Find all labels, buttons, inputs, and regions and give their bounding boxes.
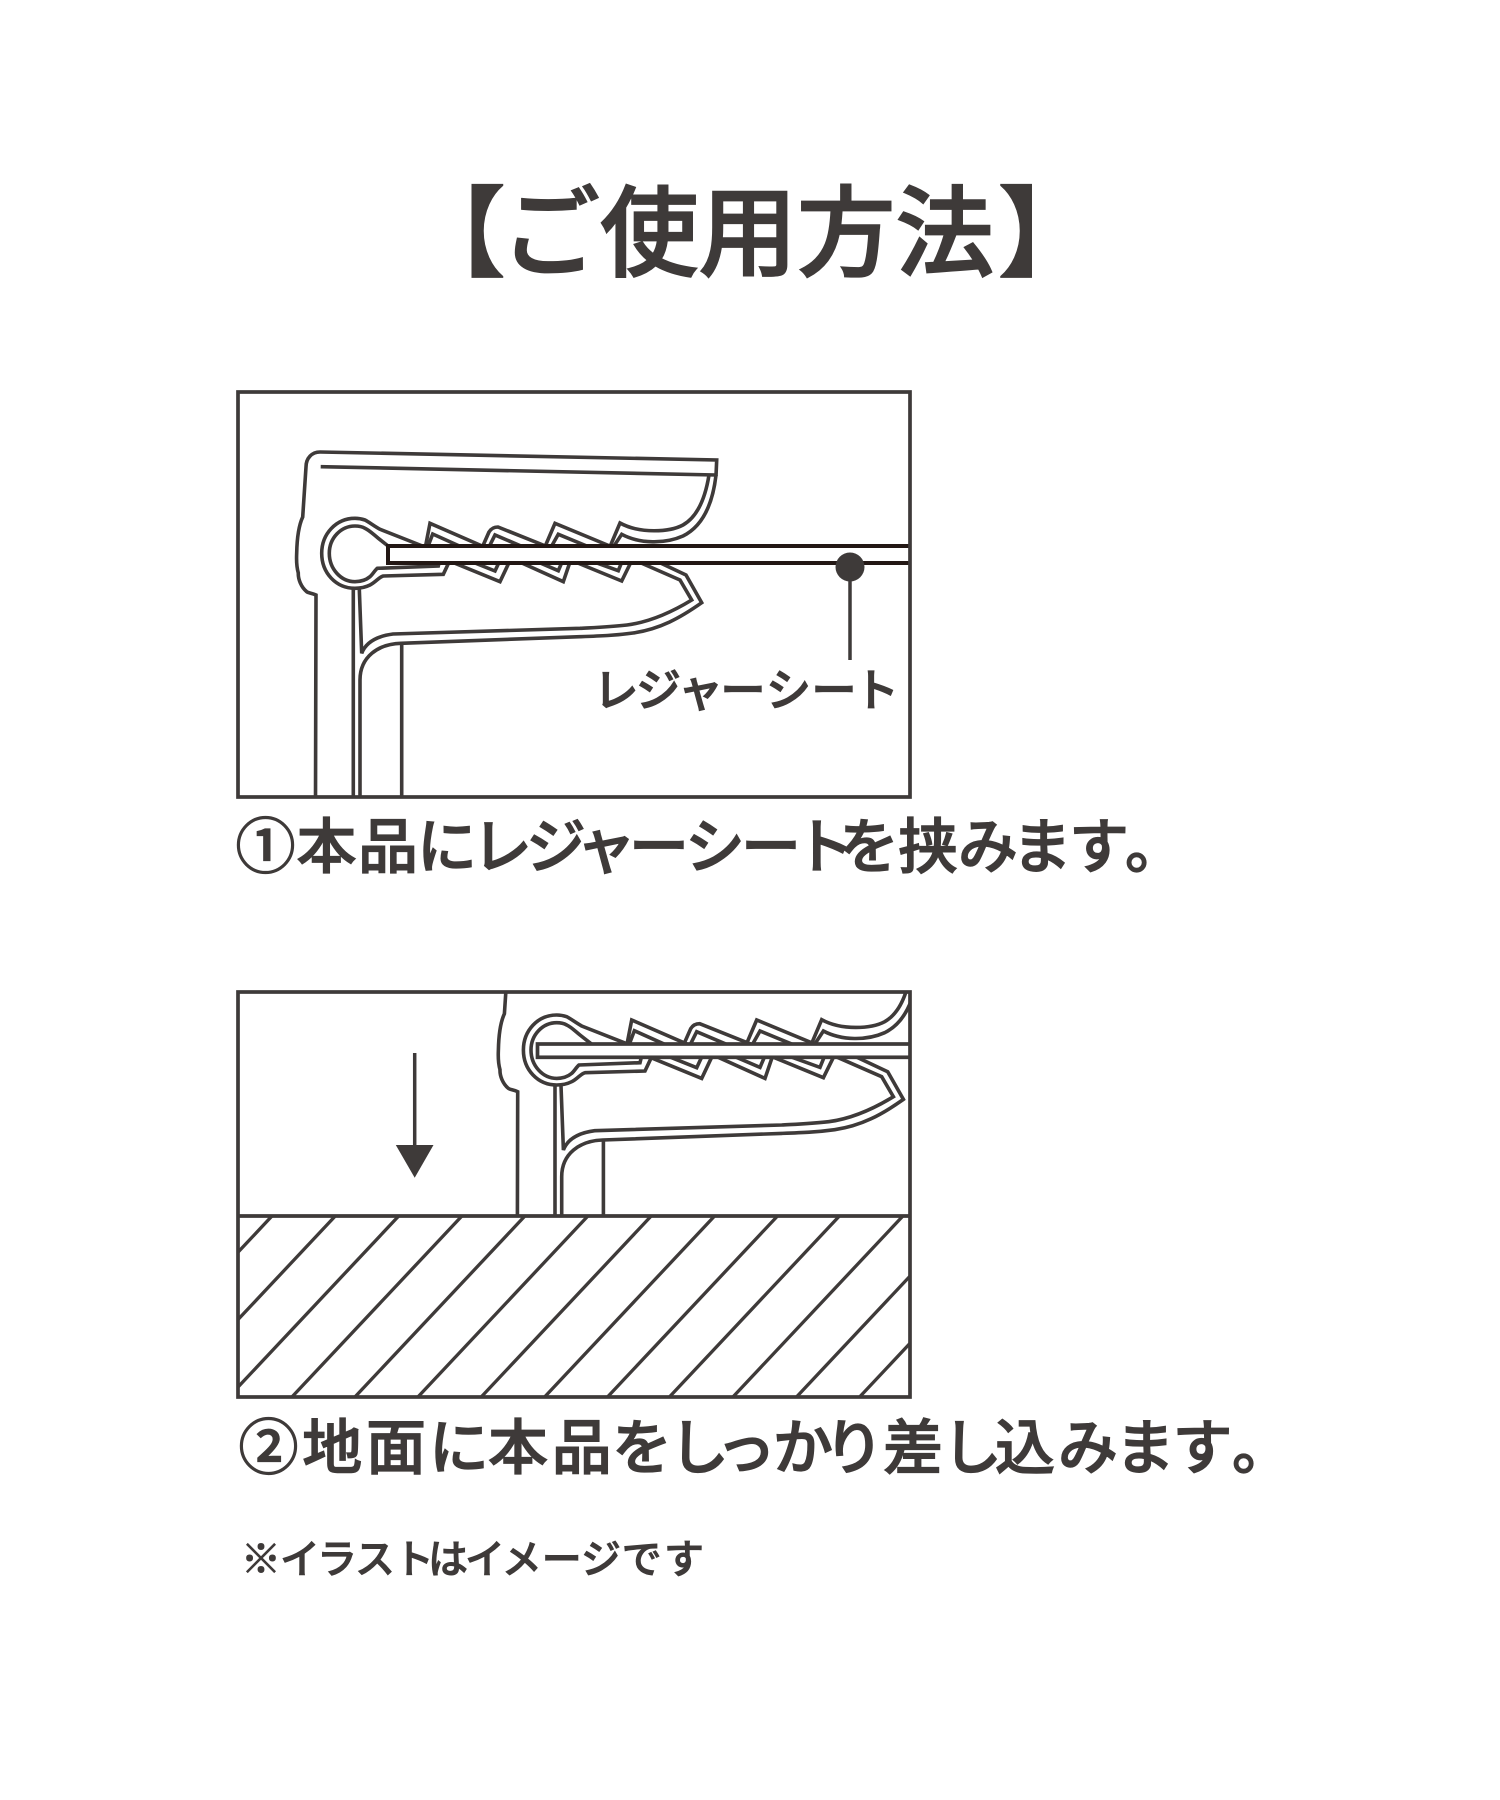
step 2 caption: ②地面に本品をしっかり差し込みます。 [238, 1415, 1292, 1482]
hatched ground [240, 1218, 908, 1396]
step 1 caption: ①本品にレジャーシートを挟みます。 [236, 814, 1185, 881]
panel: step 1 illustration [238, 392, 918, 800]
sheet label: レジャーシート [594, 665, 899, 716]
footnote: ※イラストはイメージです [241, 1538, 704, 1582]
leisure sheet [388, 546, 918, 563]
frame [238, 992, 910, 1397]
frame [238, 392, 910, 797]
clip illustration holding the sheet [297, 452, 717, 800]
title: 【ご使用方法】 [407, 179, 1097, 289]
leisure sheet [538, 1044, 918, 1057]
panel: step 2 illustration [236, 990, 912, 1399]
callout dot and leader [836, 552, 864, 660]
arrow: downward insertion [396, 1053, 434, 1178]
clip illustration inserted in ground [496, 994, 908, 1214]
ground line [238, 1214, 910, 1218]
